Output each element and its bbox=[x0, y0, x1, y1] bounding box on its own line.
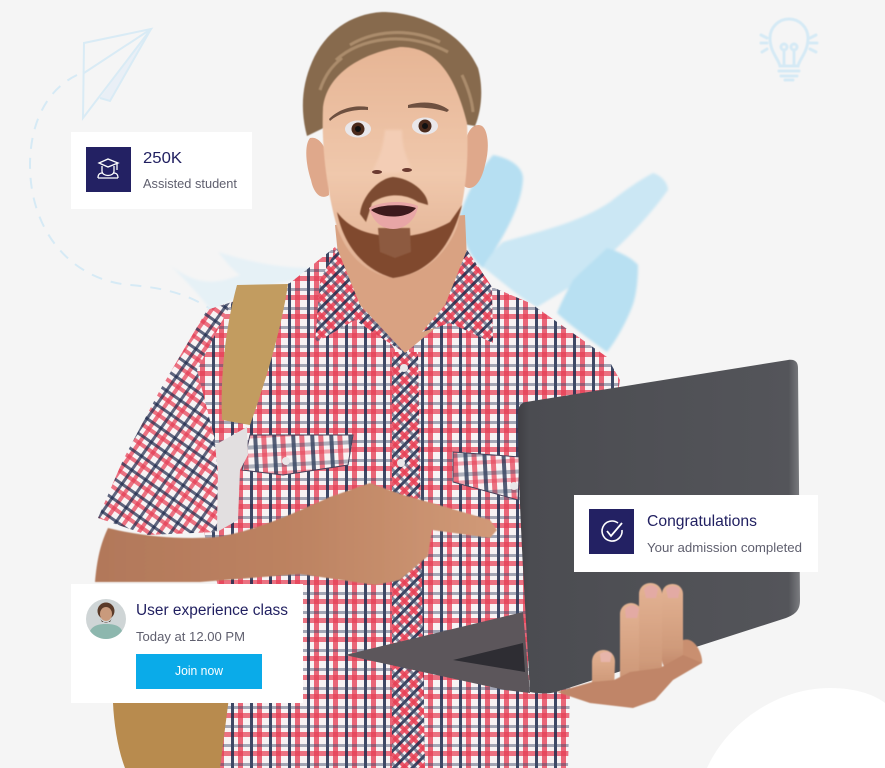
eye left bbox=[345, 120, 371, 138]
card: user experience class bbox=[71, 584, 303, 703]
shirt pocket left bbox=[242, 435, 353, 475]
neck bbox=[335, 215, 467, 353]
shirt body bbox=[190, 247, 620, 768]
card: user experience class: Today at 12.00 PM bbox=[136, 629, 245, 644]
mouth bbox=[369, 202, 418, 229]
icon: check circle bbox=[589, 509, 634, 554]
ear left bbox=[306, 138, 329, 197]
laptop lid bbox=[518, 360, 800, 694]
beard bbox=[337, 205, 462, 278]
shirt buttons bbox=[282, 364, 518, 490]
backpack body bbox=[113, 700, 232, 768]
backpack buckle bbox=[215, 427, 248, 532]
shirt pocket right bbox=[453, 452, 520, 500]
avatar bbox=[86, 599, 126, 639]
card: assisted student bbox=[71, 132, 252, 209]
icon: graduate bbox=[86, 147, 131, 192]
backpack strap bbox=[222, 284, 288, 425]
eye right bbox=[412, 118, 438, 134]
nose bbox=[373, 130, 411, 173]
right hand bbox=[557, 583, 702, 708]
eyebrows bbox=[329, 106, 368, 121]
shirt placket bbox=[392, 352, 425, 768]
dashed flight path bbox=[30, 75, 212, 310]
card: congratulations: Congratulations bbox=[647, 513, 757, 530]
button: join now: Join now bbox=[175, 663, 224, 678]
laptop keyboard bbox=[453, 643, 525, 672]
collar right bbox=[422, 250, 493, 343]
card: assisted student: 250K bbox=[143, 150, 182, 167]
hair bbox=[303, 12, 481, 136]
collar left bbox=[315, 248, 405, 353]
arm and pointing hand bbox=[95, 483, 497, 585]
white blob bottom right bbox=[707, 688, 885, 768]
icon: light bulb bbox=[761, 19, 817, 80]
shirt sleeve left bbox=[98, 302, 232, 535]
card: user experience class: User experience class bbox=[136, 602, 288, 619]
icon: paper plane bbox=[83, 29, 151, 118]
button: join now bbox=[136, 654, 262, 689]
person bbox=[95, 12, 800, 768]
laptop base bbox=[345, 612, 530, 693]
moustache bbox=[360, 177, 428, 222]
card: assisted student: Assisted student bbox=[143, 176, 237, 191]
blue brush strokes bbox=[170, 155, 668, 352]
face bbox=[323, 47, 468, 278]
ear right bbox=[464, 125, 488, 188]
card: congratulations: Your admission completed bbox=[647, 540, 802, 555]
card: congratulations bbox=[574, 495, 818, 572]
